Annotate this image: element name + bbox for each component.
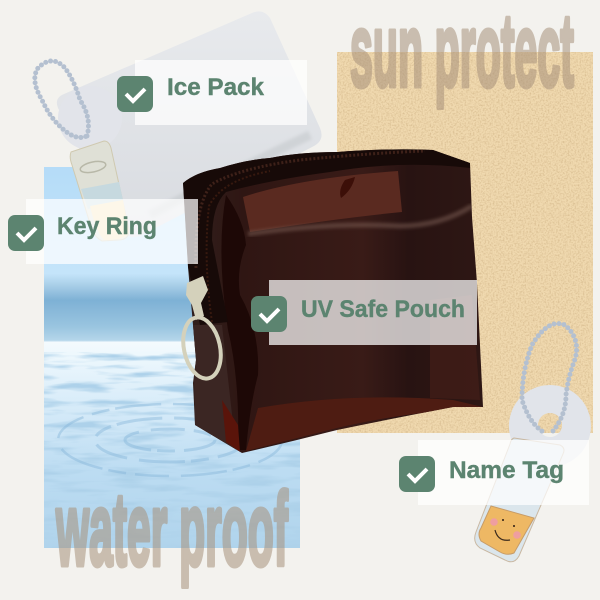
pouch body — [183, 149, 483, 453]
strip: name tag label — [418, 440, 589, 505]
icon: check — [399, 456, 435, 492]
ball chain — [522, 324, 577, 433]
name tag charm — [475, 324, 591, 562]
suction disc — [509, 385, 591, 467]
label: uv safe pouch — [251, 296, 465, 332]
label: name tag — [399, 456, 564, 492]
zip pull — [178, 276, 226, 382]
reddish insert panel — [243, 171, 402, 232]
lower red band — [246, 397, 483, 451]
top dark band — [183, 148, 470, 325]
label: ice pack — [117, 74, 265, 112]
zipper tape — [196, 151, 425, 268]
strip: key ring label — [26, 199, 198, 264]
icon: check — [117, 76, 153, 112]
charm body — [475, 438, 564, 562]
text: ice pack: Ice Pack — [167, 74, 265, 101]
label: key ring — [8, 213, 157, 251]
side panel — [193, 325, 236, 450]
suction disc — [58, 86, 122, 150]
strip: uv safe pouch label — [269, 280, 477, 345]
ice pack — [57, 11, 322, 237]
key ring charm — [35, 61, 129, 241]
folded left side — [221, 195, 258, 450]
text: uv safe pouch: UV Safe Pouch — [301, 296, 465, 323]
text: name tag: Name Tag — [449, 457, 564, 484]
charm body — [70, 141, 129, 241]
icon: check — [8, 215, 44, 251]
pouch — [178, 148, 483, 453]
text: key ring: Key Ring — [57, 213, 157, 240]
soft highlight — [248, 206, 472, 234]
ball chain — [35, 61, 88, 137]
strip: ice pack label — [135, 60, 307, 125]
panel: water photo — [44, 167, 300, 548]
icon: check — [251, 296, 287, 332]
panel: sand photo — [337, 52, 593, 433]
